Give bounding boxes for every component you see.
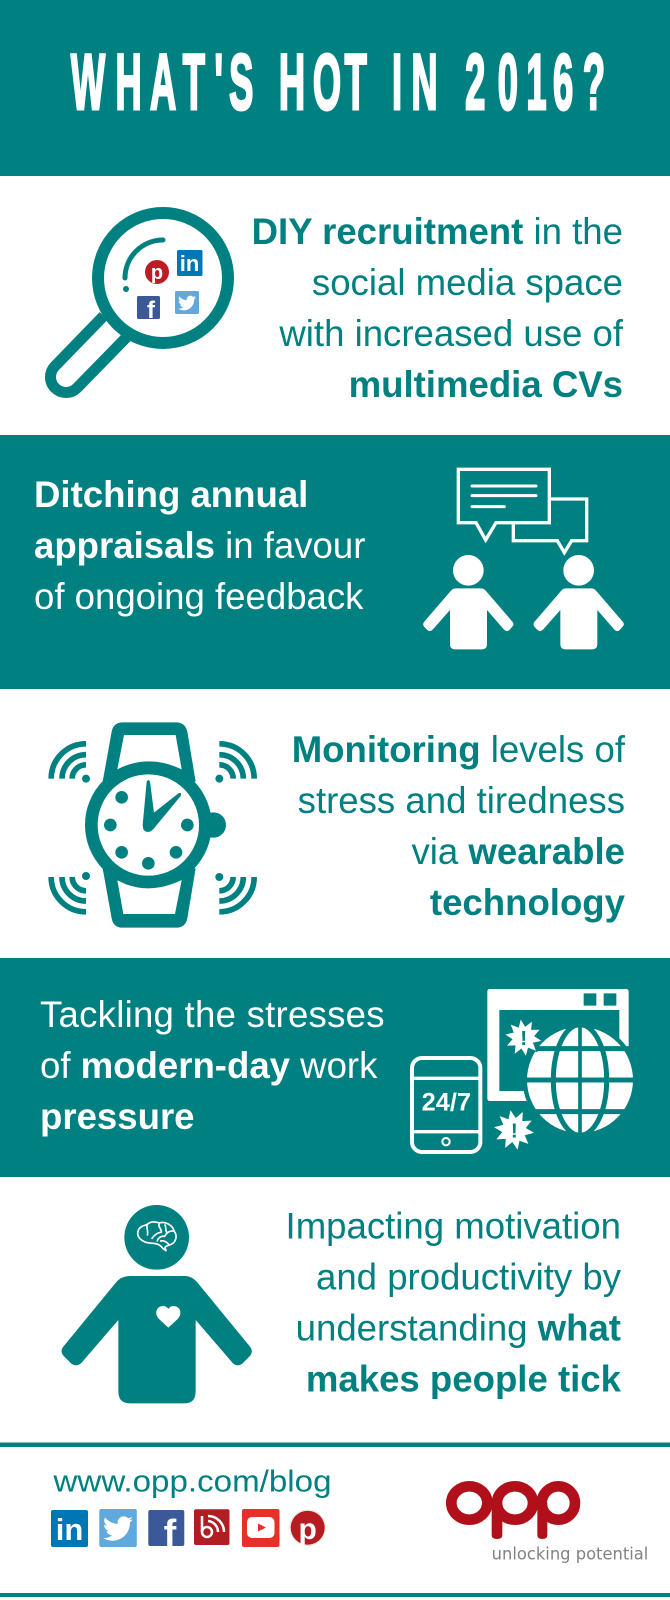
- text: motivation and productivity: and productivity by: [316, 1256, 622, 1298]
- icon: magnifying glass with social media: f: [147, 297, 156, 324]
- icon: pinterest: [289, 1509, 326, 1546]
- text: blog url: www.opp.com/blog: [52, 1464, 331, 1498]
- icon: two people with speech bubbles: [423, 469, 624, 649]
- panel: DIY recruitment: [50, 211, 624, 405]
- icon: facebook: [148, 1510, 184, 1555]
- icon: pinterest: p: [299, 1513, 317, 1546]
- icon: magnifying glass with social media: p: [151, 262, 163, 284]
- text: monitoring stress: stress and tiredness: [298, 780, 625, 821]
- icon: facebook: f: [164, 1513, 177, 1555]
- icon: blog: [194, 1509, 230, 1545]
- text: DIY recruitment: DIY recruitment in the: [252, 211, 623, 252]
- text: monitoring stress: Monitoring levels of: [292, 729, 625, 770]
- text: DIY recruitment: with increased use of: [278, 313, 624, 354]
- text: ditching appraisals: appraisals in favour: [34, 525, 365, 566]
- logo tagline: unlocking potential: [492, 1544, 648, 1563]
- text: modern-day pressure: pressure: [40, 1096, 195, 1137]
- text: ditching appraisals: Ditching annual: [34, 474, 308, 515]
- text: ditching appraisals: of ongoing feedback: [34, 576, 364, 617]
- panel: modern-day pressure: [0, 958, 670, 1177]
- icon: tablet, browser window and globe: 24/7: [422, 1089, 471, 1117]
- icon: youtube: [242, 1509, 280, 1547]
- icon: tablet, browser window and globe: [412, 989, 637, 1152]
- icon: smartwatch: [51, 722, 254, 928]
- text: DIY recruitment: multimedia CVs: [349, 364, 623, 405]
- text: motivation and productivity: Impacting motivation: [286, 1206, 621, 1246]
- panel: header: [0, 0, 670, 176]
- title: WHAT'S HOT IN 2016?: [71, 39, 605, 127]
- text: motivation and productivity: makes people tick: [306, 1358, 622, 1400]
- panel: footer: [0, 1442, 670, 1597]
- panel: monitoring stress: [51, 722, 626, 928]
- icon: tablet, browser window and globe: !: [520, 1027, 527, 1050]
- icon: tablet, browser window and globe: !: [511, 1120, 518, 1143]
- icon: person with brain and heart: [62, 1205, 252, 1403]
- icon: magnifying glass with social media: [50, 213, 228, 393]
- text: monitoring stress: via wearable: [412, 831, 625, 872]
- icon: linkedin: in: [56, 1512, 83, 1547]
- text: motivation and productivity: understanding what: [296, 1308, 621, 1348]
- text: modern-day pressure: Tackling the stresses: [40, 994, 385, 1035]
- panel: motivation and productivity: [62, 1205, 622, 1403]
- icon: magnifying glass with social media: in: [180, 251, 199, 276]
- logo: opp: [451, 1486, 648, 1563]
- text: monitoring stress: technology: [430, 882, 626, 923]
- text: DIY recruitment: social media space: [312, 262, 623, 303]
- panel: ditching appraisals: [0, 435, 670, 689]
- text: modern-day pressure: of modern-day work: [40, 1045, 377, 1086]
- icon: twitter: [99, 1509, 137, 1547]
